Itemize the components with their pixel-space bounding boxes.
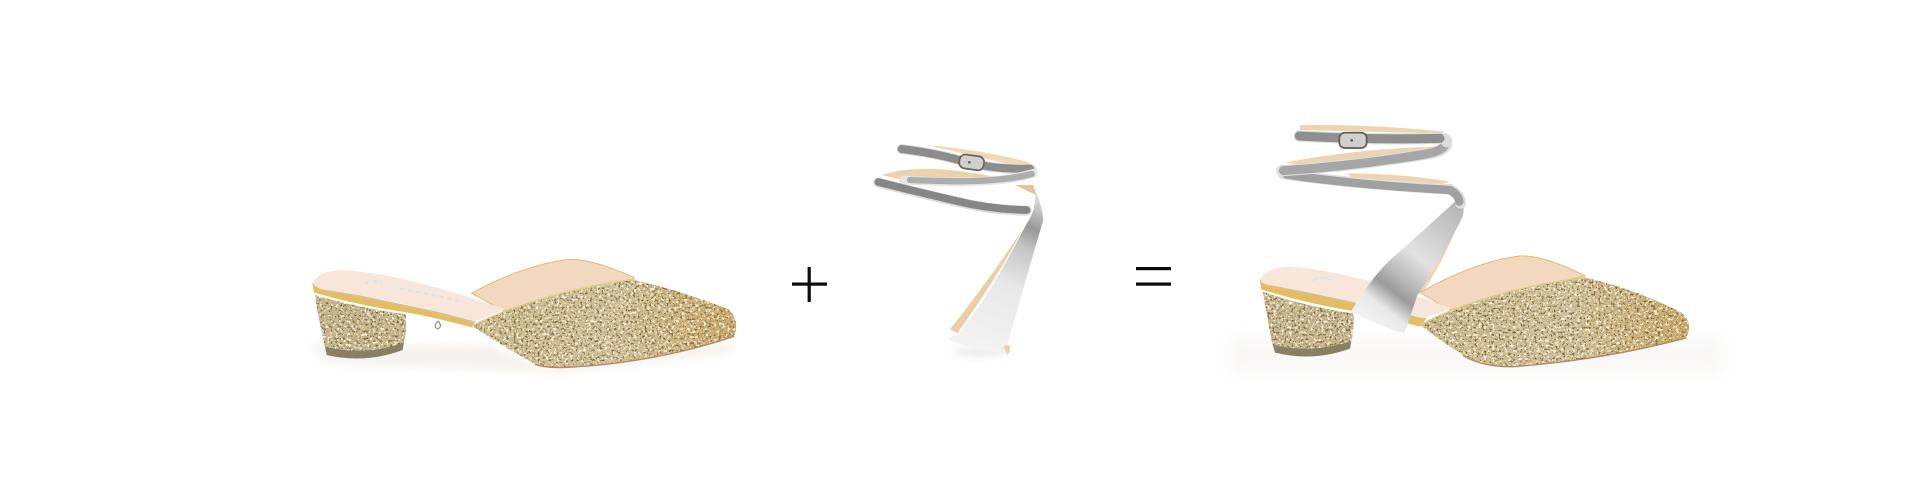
footbed logo bbox=[1313, 278, 1333, 281]
upper edge piping bbox=[1420, 278, 1585, 325]
tan lining, long tail bbox=[950, 228, 1023, 333]
leather sole bbox=[1463, 338, 1686, 367]
buckle bbox=[958, 154, 985, 171]
tail end lining bbox=[1003, 345, 1010, 355]
gold rim bbox=[1260, 279, 1427, 327]
lower strap band bbox=[878, 182, 1027, 211]
photo backdrop shadow bbox=[1230, 337, 1723, 373]
glitter upper bbox=[1420, 278, 1689, 366]
ground shadow bbox=[310, 342, 733, 373]
leather sole bbox=[535, 336, 734, 368]
footbed silver edge bbox=[1270, 286, 1423, 319]
upper edge piping bbox=[472, 279, 634, 326]
top strap band bbox=[1299, 136, 1447, 142]
tan lining, middle loop bbox=[882, 169, 997, 180]
loose silver ankle strap bbox=[878, 145, 1043, 356]
glitter upper bbox=[472, 280, 736, 367]
tan lining, top loop bbox=[927, 145, 1035, 170]
middle strap band bbox=[903, 173, 1033, 182]
gold rim bbox=[312, 283, 477, 327]
footbed logo bbox=[365, 281, 463, 302]
tan lining, back of loop bbox=[1015, 185, 1036, 195]
top strap band bbox=[902, 149, 1032, 169]
footbed silver edge bbox=[323, 290, 475, 322]
buckle bbox=[1339, 133, 1367, 148]
wide silver strap bbox=[1351, 199, 1464, 333]
heel block bbox=[315, 295, 406, 359]
equals sign bbox=[1136, 267, 1171, 286]
lower strap band bbox=[1283, 174, 1461, 203]
plus sign bbox=[792, 267, 827, 302]
interior lining bbox=[472, 259, 634, 311]
heel block bbox=[1263, 292, 1354, 357]
footbed bbox=[1261, 267, 1452, 318]
tan lining, strap loops bbox=[1285, 125, 1465, 293]
wide silver tail bbox=[948, 190, 1043, 355]
shoe: gold glitter mule bbox=[310, 259, 736, 373]
strap shadow bbox=[952, 348, 1005, 356]
footbed bbox=[313, 270, 505, 322]
shoe with strap attached bbox=[1230, 125, 1723, 373]
pull ring bbox=[435, 321, 441, 329]
interior lining bbox=[1420, 256, 1585, 310]
middle strap band bbox=[1282, 143, 1447, 171]
